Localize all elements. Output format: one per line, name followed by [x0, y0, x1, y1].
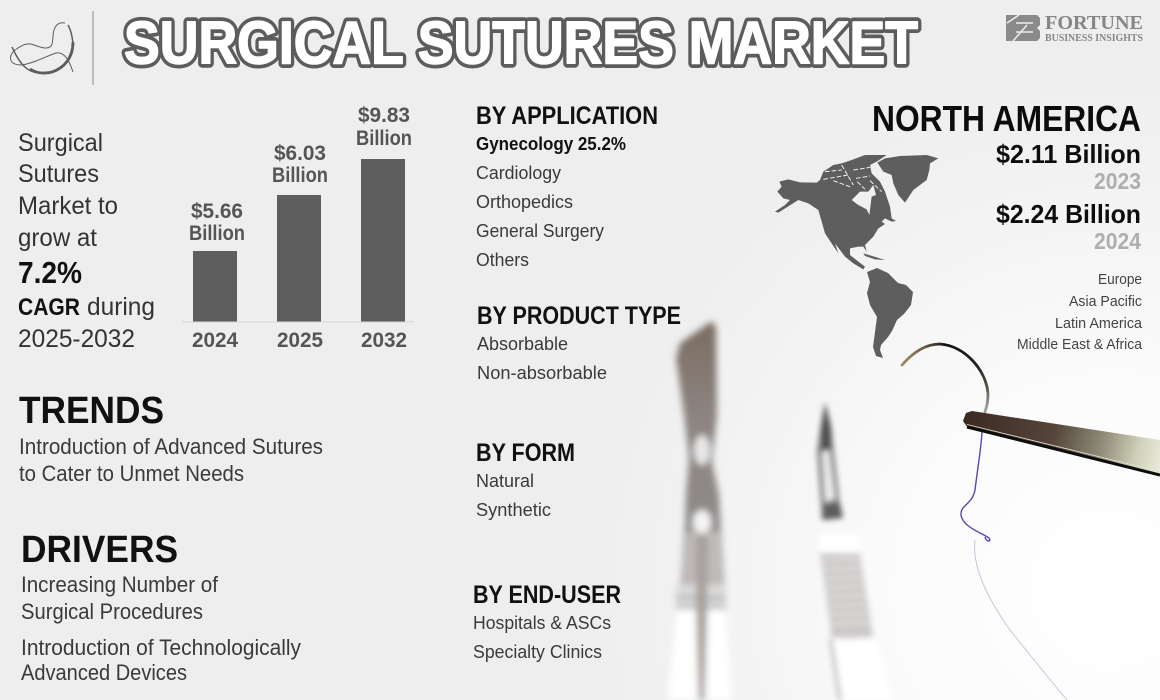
- text block: CAGR summary: Surgical: [18, 129, 103, 157]
- panel: by product type: BY PRODUCT TYPE: [477, 302, 681, 330]
- photo: forceps: [963, 411, 1160, 475]
- bar chart: [182, 104, 414, 352]
- map: the Americas: [775, 155, 938, 358]
- panel: trends: to Cater to Unmet Needs: [19, 461, 244, 486]
- list: other regions: [1017, 271, 1143, 353]
- panel: by end-user: Hospitals & ASCs: [473, 613, 611, 633]
- panel: by end-user: Specialty Clinics: [473, 642, 602, 662]
- panel: drivers: [21, 529, 301, 685]
- panel: by application: Others: [476, 250, 529, 270]
- panel: drivers: Surgical Procedures: [21, 599, 203, 624]
- panel: trends: [19, 390, 323, 486]
- panel: by form: BY FORM: [476, 439, 575, 467]
- photo: curved suture needle: [902, 344, 988, 412]
- photo: blurred scalpel: [817, 402, 892, 700]
- text block: CAGR summary: Sutures: [18, 160, 99, 188]
- divider: [92, 11, 94, 85]
- panel: by form: Natural: [476, 471, 534, 491]
- icon: suture needle logo: [11, 23, 73, 73]
- photo: purple suture thread: [961, 432, 1067, 700]
- logo: Fortune Business Insights: FORTUNE: [1045, 12, 1143, 34]
- panel: by product type: [477, 302, 681, 383]
- bar chart: 2024: [192, 329, 238, 352]
- panel: drivers: Introduction of Technologically: [21, 635, 301, 660]
- bar chart: Billion: [356, 127, 412, 150]
- bar chart: 2032: [361, 329, 407, 352]
- bar chart: $5.66: [191, 200, 243, 223]
- text block: CAGR summary: during: [87, 293, 155, 321]
- panel: by end-user: BY END-USER: [473, 581, 621, 609]
- panel: trends: Introduction of Advanced Sutures: [19, 434, 323, 459]
- panel: north america stats: 2023: [1094, 168, 1141, 194]
- bar chart: Billion: [189, 222, 245, 245]
- bar chart: $9.83: [358, 104, 410, 127]
- list: other regions: Latin America: [1055, 315, 1143, 332]
- panel: by end-user: [473, 581, 621, 662]
- logo: Fortune Business Insights: [1006, 12, 1143, 44]
- panel: by application: BY APPLICATION: [476, 102, 658, 130]
- panel: by product type: Non-absorbable: [477, 363, 607, 383]
- panel: by application: [476, 102, 658, 270]
- logo: Fortune Business Insights: BUSINESS INSIGHTS: [1045, 32, 1143, 44]
- bar chart: $6.03: [274, 142, 326, 165]
- list: other regions: Asia Pacific: [1069, 293, 1142, 310]
- bar chart: 2025: [277, 329, 323, 352]
- panel: north america stats: $2.11 Billion: [996, 139, 1141, 169]
- panel: by form: Synthetic: [476, 500, 551, 520]
- list: other regions: Europe: [1098, 271, 1142, 288]
- text block: CAGR summary: [18, 129, 155, 353]
- panel: trends: TRENDS: [19, 390, 164, 432]
- panel: drivers: Increasing Number of: [21, 572, 219, 597]
- panel: by application: Gynecology 25.2%: [476, 134, 626, 154]
- panel: by application: Cardiology: [476, 163, 561, 183]
- panel: drivers: Advanced Devices: [21, 660, 187, 685]
- panel: north america stats: 2024: [1094, 228, 1141, 254]
- photo: blurred surgical scissors: [668, 321, 732, 700]
- text block: CAGR summary: grow at: [18, 224, 97, 252]
- text block: CAGR summary: Market to: [18, 192, 118, 220]
- bar chart: Billion: [272, 164, 328, 187]
- title: SURGICAL SUTURES MARKET: [124, 10, 918, 76]
- text block: CAGR summary: CAGR: [18, 294, 80, 321]
- panel: drivers: DRIVERS: [21, 529, 178, 571]
- text block: CAGR summary: 2025-2032: [18, 325, 135, 353]
- list: other regions: Middle East & Africa: [1017, 336, 1143, 353]
- panel: by form: [476, 439, 575, 520]
- panel: north america stats: [872, 98, 1141, 254]
- panel: north america stats: $2.24 Billion: [996, 199, 1141, 229]
- panel: by application: General Surgery: [476, 221, 604, 241]
- panel: by product type: Absorbable: [477, 334, 568, 354]
- title: SURGICAL SUTURES MARKET: [124, 10, 918, 76]
- text block: CAGR summary: 7.2%: [18, 255, 82, 290]
- panel: by application: Orthopedics: [476, 192, 573, 212]
